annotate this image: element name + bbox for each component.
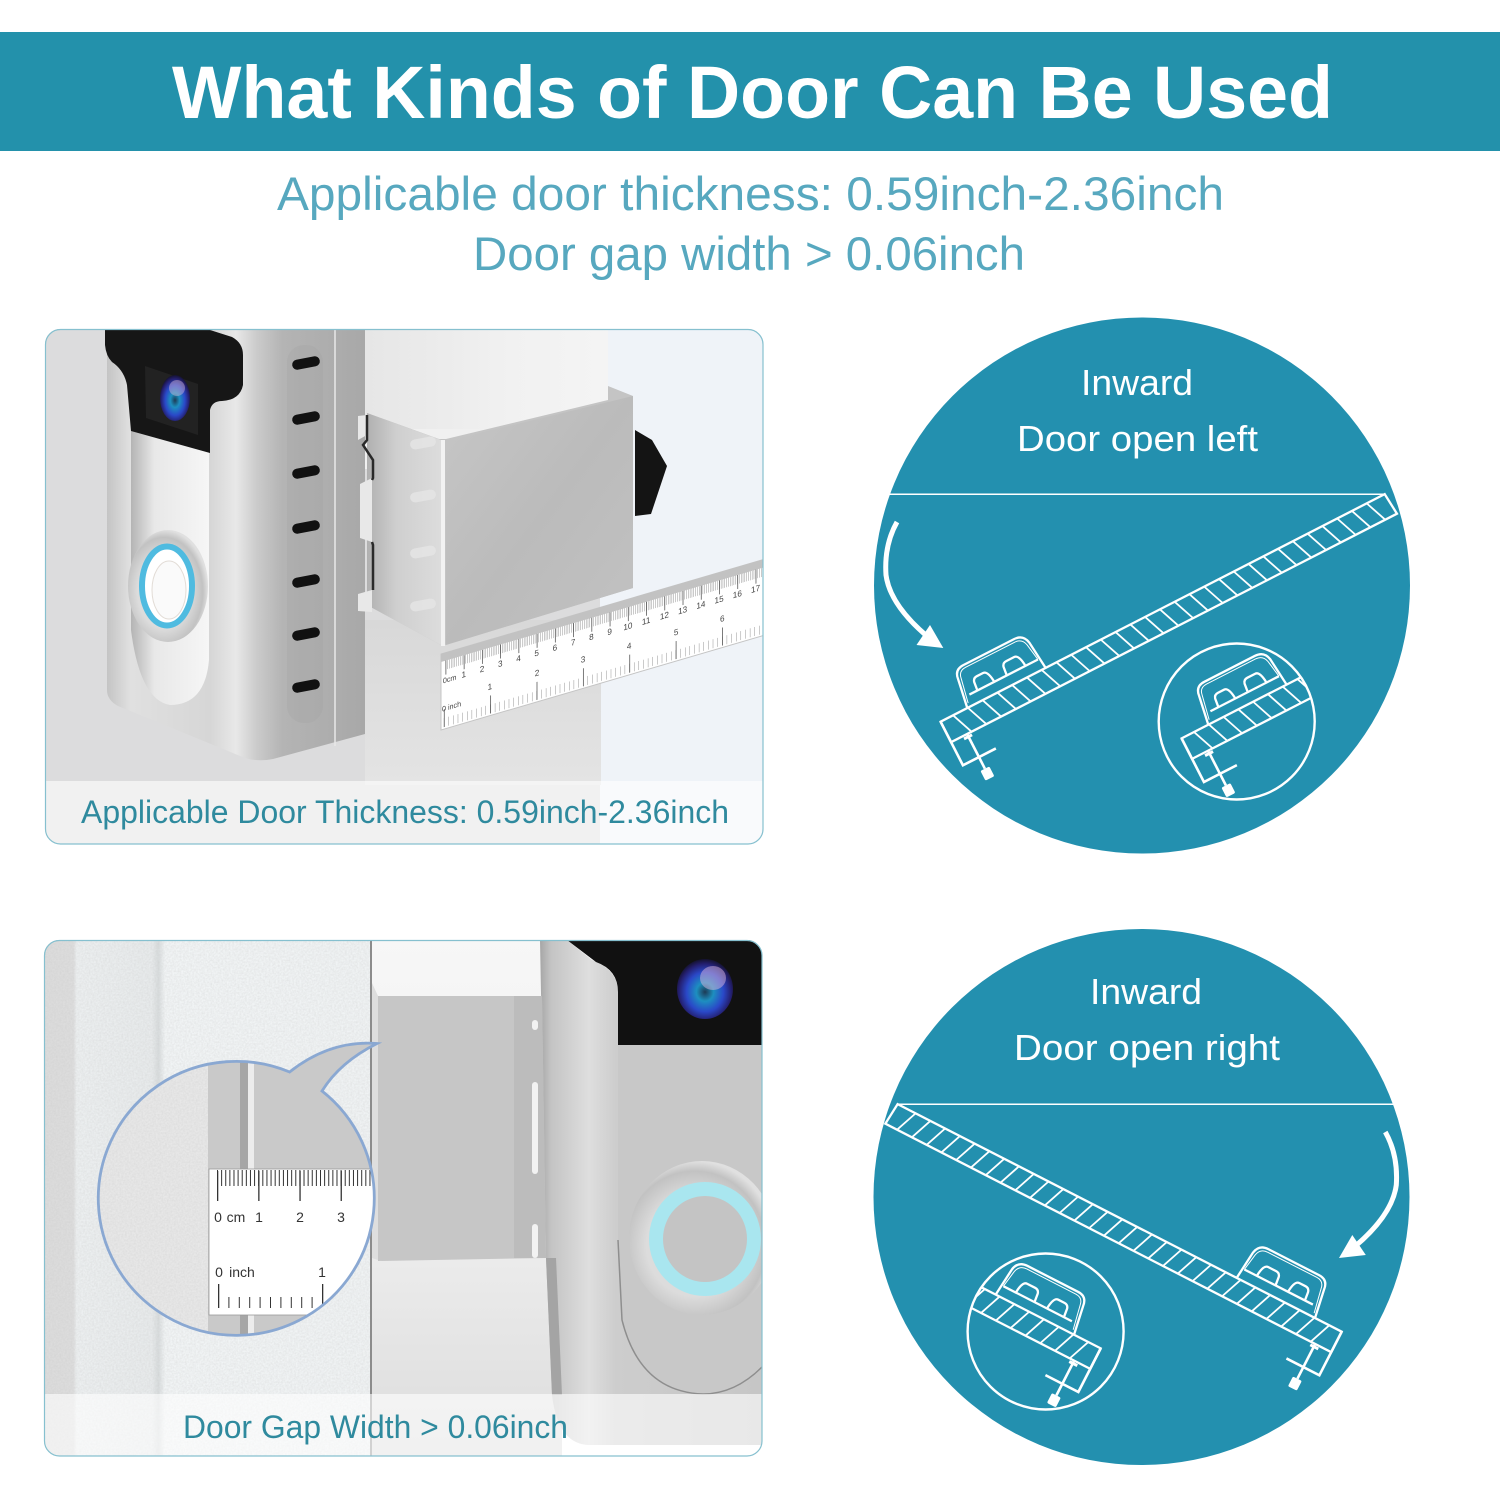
ruler: 2 (535, 667, 540, 679)
callout ruler: 0 (215, 1264, 223, 1280)
mirrored door diagram (884, 1102, 1400, 1411)
knob (635, 430, 667, 516)
ruler: 17 (751, 582, 760, 595)
label: door open right: Door open right (1014, 1027, 1280, 1068)
caption strip (44, 1394, 762, 1457)
camera lens (677, 959, 733, 1019)
subtitle: door thickness and gap: Applicable door thickness: 0.59inch-2.36inch (277, 167, 1224, 220)
doorbell black camera housing (105, 330, 243, 453)
doorbell mount body (107, 330, 365, 760)
swing arrow (886, 522, 943, 648)
ruler: 13 (678, 604, 687, 616)
ruler: 10 (623, 620, 633, 633)
circle panel: inward door open left (874, 318, 1410, 854)
ruler: 2 (480, 663, 485, 675)
mount body and doorbell (540, 940, 775, 1445)
label: inward: Inward (1090, 971, 1202, 1012)
ruler: 8 (589, 631, 594, 643)
ruler: 5 (674, 626, 679, 638)
title band (0, 32, 1500, 151)
detail inset (966, 1252, 1125, 1411)
ruler: 7 (571, 636, 576, 648)
panel: door thickness photo (45, 329, 767, 845)
ruler: 1 (461, 669, 466, 680)
ruler: 14 (696, 598, 706, 611)
doorbell button ring (128, 530, 208, 642)
subtitle: door thickness and gap (277, 167, 1224, 280)
ruler: 16 (733, 588, 742, 600)
camera lens (160, 375, 190, 421)
callout ruler (209, 1169, 374, 1315)
callout ruler: 3 (337, 1209, 345, 1225)
ruler: 15 (715, 593, 724, 606)
callout ruler: 1 (318, 1264, 326, 1280)
ruler: 3 (581, 654, 586, 665)
door plan diagram (863, 1068, 1360, 1397)
ruler: 5 (534, 647, 539, 659)
detail inset (1158, 642, 1316, 801)
label: inward: Inward (1081, 362, 1193, 403)
mount slots (291, 355, 321, 694)
title text: What Kinds of Door Can Be Used (172, 51, 1333, 134)
black camera housing (567, 940, 762, 1045)
callout ruler: inch (229, 1264, 255, 1280)
ruler: 1 (488, 681, 492, 692)
ruler: 0cm (443, 672, 456, 685)
ruler: 4 (516, 653, 521, 664)
ruler: 12 (660, 609, 669, 622)
button ring (636, 1161, 762, 1308)
callout ruler: 2 (296, 1209, 304, 1225)
callout ruler: 1 (255, 1209, 263, 1225)
callout ruler: cm (227, 1209, 245, 1225)
ruler: 6 (720, 613, 725, 624)
bracket plate (372, 983, 546, 1261)
ruler (441, 558, 767, 730)
ruler: 0 inch (442, 699, 461, 714)
caption: door thickness: Applicable Door Thickness: 0.59inch-2.36inch (81, 794, 729, 830)
callout ruler: 0 (214, 1209, 222, 1225)
ruler: 6 (553, 642, 557, 653)
circle panel: inward door open right (874, 929, 1410, 1465)
callout bubble with ruler (90, 1040, 380, 1340)
swing arrow (1339, 1132, 1397, 1258)
ruler: 9 (607, 626, 612, 637)
bracket (358, 386, 633, 646)
panel: door gap photo (44, 940, 775, 1457)
ruler: 3 (498, 658, 503, 669)
label: door open left: Door open left (1017, 418, 1258, 459)
doorbell face plate (131, 430, 209, 705)
subtitle: door thickness and gap: Door gap width > 0.06inch (473, 227, 1025, 280)
ruler: 4 (627, 640, 632, 651)
caption strip (45, 781, 763, 845)
door plan diagram (922, 458, 1420, 787)
ruler: 11 (642, 615, 651, 627)
caption: door gap: Door Gap Width > 0.06inch (183, 1409, 568, 1445)
